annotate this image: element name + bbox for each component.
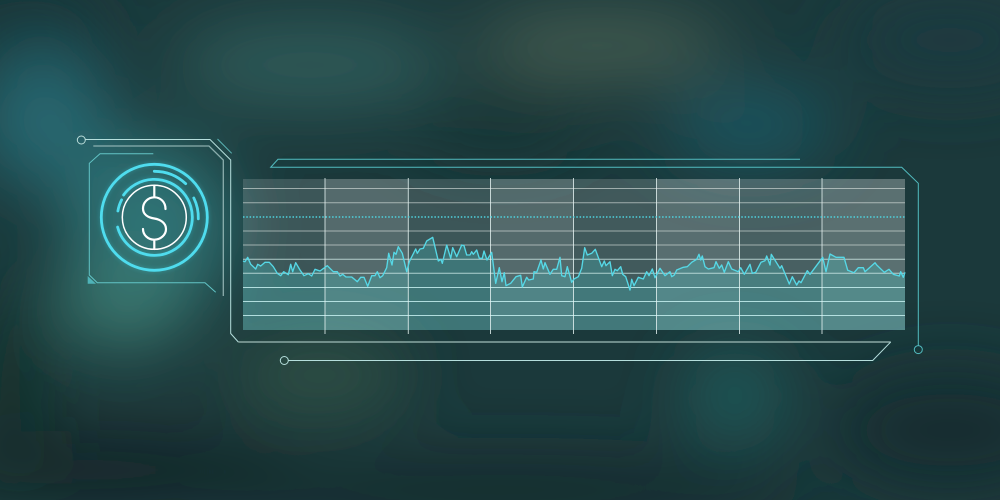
inner white circle [122,185,186,249]
frame: left bracket lines [77,136,238,342]
icon: dollar coin [101,164,207,270]
area beneath line [243,237,905,330]
icon glow [101,164,207,270]
dotted threshold line [243,216,905,218]
outer ring [101,164,207,270]
icon panel outline [88,154,216,292]
horizontal grid lines [243,188,905,316]
top parallelogram frame [271,159,918,346]
dollar sign [143,186,166,249]
vertical grid lines [325,178,822,334]
arc segments [118,171,198,255]
terminal node right [914,346,922,354]
data line [243,237,905,290]
column shading [243,179,905,330]
bottom frame lines [238,342,891,364]
chart panel [243,178,905,334]
